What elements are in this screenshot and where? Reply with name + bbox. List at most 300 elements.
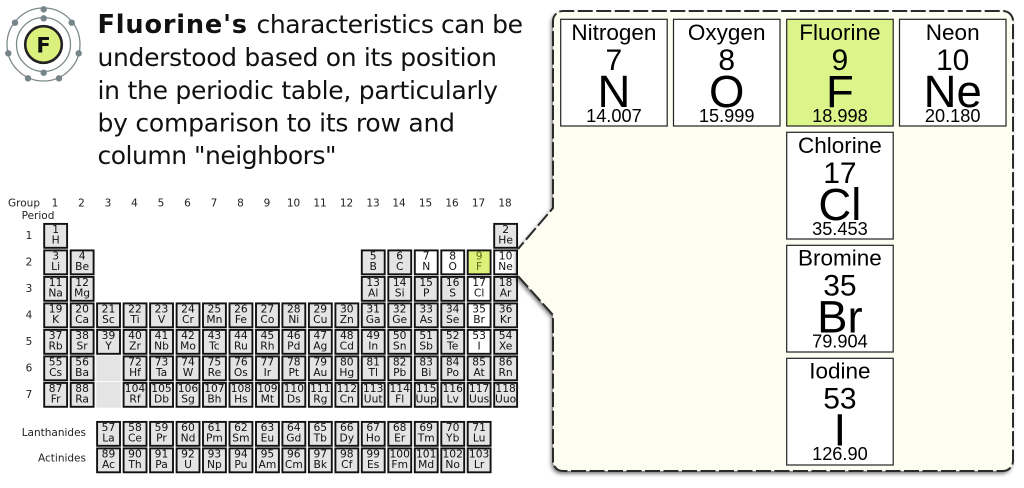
period 5: Rb: [48, 340, 63, 353]
card: iodine: Iodine: [809, 358, 871, 383]
period 4: V: [158, 313, 166, 326]
title text block: in the periodic table, particularly: [98, 76, 498, 105]
period 5: 53: [472, 329, 486, 342]
period 3: Cl: [474, 287, 484, 300]
lanthanides row: Pm: [206, 432, 223, 445]
title text block: understood based on its position: [98, 43, 497, 72]
period 5: 40: [128, 329, 142, 342]
period 3: Al: [368, 287, 378, 300]
period 1: 1: [52, 223, 59, 236]
period 2: Be: [75, 260, 89, 273]
period 5: [44, 329, 517, 354]
period 4: Mn: [206, 313, 222, 326]
card: neon: Neon: [926, 20, 980, 45]
lanthanides row: Tb: [313, 432, 327, 445]
period 7: 107: [204, 382, 225, 395]
period 6: Pt: [288, 366, 299, 379]
period 6: [44, 356, 517, 381]
icon: fluorine atom electron shells: F: [36, 34, 51, 58]
period 7: 109: [257, 382, 278, 395]
period 4: 27: [261, 302, 274, 316]
card: fluorine: 18.998: [812, 106, 868, 126]
period 7: 112: [337, 382, 357, 395]
actinides row: 100: [389, 448, 410, 460]
lanthanides row: 62: [234, 421, 248, 434]
period 4: 32: [393, 302, 407, 316]
period 6: 55: [49, 356, 62, 368]
lanthanides row: Sm: [232, 432, 250, 445]
period 3: 15: [419, 276, 433, 289]
lanthanides row: Lu: [473, 432, 485, 445]
period 6: Tl: [367, 366, 378, 379]
period 7: 115: [416, 382, 436, 395]
card: fluorine: Fluorine: [799, 20, 881, 45]
period 2: Ne: [498, 260, 513, 273]
period 6: 79: [313, 356, 327, 368]
period 6: 85: [472, 356, 486, 368]
period 4: Fe: [235, 313, 247, 326]
group and period axis labels: 7: [211, 198, 217, 210]
group and period axis labels: 16: [445, 198, 459, 210]
period 3: 13: [366, 276, 380, 289]
actinides row: 92: [181, 448, 195, 460]
period 3: Mg: [74, 287, 90, 300]
period 5: 38: [75, 329, 89, 342]
group and period axis labels: 2: [78, 198, 85, 210]
lanthanides row: 71: [472, 421, 486, 434]
period 4: [44, 302, 517, 327]
period 1: He: [498, 234, 513, 247]
card: fluorine: 9: [832, 44, 848, 77]
period 4: Cu: [313, 313, 327, 326]
card: nitrogen: 7: [606, 44, 622, 77]
period 5: In: [368, 340, 378, 353]
period 5: 48: [340, 329, 354, 342]
period 3: P: [423, 287, 430, 300]
group and period axis labels: 1: [52, 198, 58, 210]
period 4: Ga: [366, 313, 381, 326]
period 2: O: [448, 260, 457, 273]
title text block: characteristics can be: [256, 10, 523, 39]
period 1: H: [52, 234, 60, 247]
lanthanides row: 58: [128, 421, 142, 434]
actinides row: Es: [367, 458, 380, 471]
lanthanides row: La: [102, 432, 115, 445]
period 4: As: [420, 313, 433, 326]
period 6: 56: [75, 356, 89, 368]
group and period axis labels: 3: [26, 283, 32, 295]
group and period axis labels: Group: [8, 198, 40, 210]
period 4: 24: [181, 302, 195, 316]
period 7: Uup: [416, 393, 437, 406]
callout panel with pointer to fluorine neighbors: [518, 11, 1013, 471]
period 6: 76: [234, 356, 248, 368]
period 4: 34: [446, 302, 460, 316]
period 7: Rf: [129, 393, 141, 406]
group and period axis labels: Actinides: [38, 452, 86, 464]
lanthanides row: 60: [181, 421, 195, 434]
period 6: 72: [128, 356, 142, 368]
actinides row: 102: [442, 448, 463, 460]
lanthanides row: Ce: [128, 432, 142, 445]
actinides row: [97, 448, 491, 472]
actinides row: 93: [208, 448, 221, 460]
card: nitrogen: Nitrogen: [571, 20, 656, 45]
card: oxygen: [674, 19, 780, 126]
period 6: 86: [499, 356, 513, 368]
period 7: Fl: [395, 393, 404, 406]
card: fluorine: F: [826, 66, 854, 117]
period 7: Bh: [207, 393, 221, 406]
period 7: Lv: [447, 393, 459, 406]
lanthanides row: Er: [394, 432, 406, 445]
period 7: 104: [125, 382, 145, 395]
lanthanides row: Ho: [366, 432, 380, 445]
period 5: Nb: [154, 340, 169, 353]
actinides row: U: [184, 458, 192, 471]
period 5: 49: [366, 329, 380, 342]
period 4: Kr: [500, 313, 512, 326]
period 5: Rh: [260, 340, 275, 353]
period 7: 114: [389, 382, 410, 395]
lanthanides row: Dy: [340, 432, 354, 445]
actinides row: Md: [418, 458, 434, 471]
actinides row: No: [445, 458, 460, 471]
period 7: Uus: [469, 393, 490, 406]
period 4: 36: [499, 302, 513, 316]
period 6: 84: [446, 356, 460, 368]
card: bromine: Br: [817, 292, 863, 342]
group and period axis labels: 2: [26, 256, 32, 268]
period 7: Rg: [313, 393, 327, 406]
period 5: 37: [49, 329, 62, 342]
lanthanides row: Tm: [417, 432, 435, 445]
period 4: Br: [473, 313, 486, 326]
actinides row: 94: [234, 448, 248, 460]
period 5: 50: [393, 329, 407, 342]
period 4: 25: [208, 302, 221, 316]
period 5: Ru: [234, 340, 248, 353]
actinides row: 96: [287, 448, 301, 460]
card: bromine: Bromine: [798, 246, 882, 271]
lanthanides row: 57: [102, 421, 115, 434]
lanthanides row: 70: [446, 421, 460, 434]
periodic table: [44, 223, 517, 472]
card: neon: Ne: [924, 66, 982, 117]
period 5: Y: [104, 340, 112, 353]
period 6: Cs: [49, 366, 63, 379]
period 7: Db: [154, 393, 169, 406]
lanthanides row: 67: [366, 421, 380, 434]
title text block: column "neighbors": [98, 141, 336, 170]
period 7: 88: [75, 382, 89, 395]
actinides row: Bk: [314, 458, 328, 471]
period 2: Li: [51, 260, 60, 273]
period 2: 7: [423, 250, 430, 262]
period 3: [44, 276, 517, 301]
period 4: Zn: [340, 313, 354, 326]
card: bromine: 35: [823, 270, 857, 303]
actinides row: 91: [155, 448, 168, 460]
card: nitrogen: N: [597, 66, 630, 117]
card: chlorine: Chlorine: [798, 133, 882, 158]
period 6: Os: [234, 366, 248, 379]
group and period axis labels: 1: [26, 230, 32, 242]
period 5: 44: [234, 329, 248, 342]
period 4: Sc: [102, 313, 115, 326]
period 7: 118: [495, 382, 516, 395]
lanthanides row: 65: [313, 421, 327, 434]
period 4: 22: [128, 302, 142, 316]
period 4: 35: [472, 302, 486, 316]
period 7: Fr: [51, 393, 61, 406]
period 5: 42: [181, 329, 195, 342]
period 6: Au: [313, 366, 327, 379]
card: fluorine: [787, 19, 893, 126]
period 3: Ar: [500, 287, 512, 300]
period 5: 45: [261, 329, 274, 342]
period 2: 6: [396, 250, 403, 262]
period 6: 81: [366, 356, 380, 368]
period 5: Sb: [419, 340, 433, 353]
period 5: 46: [287, 329, 301, 342]
period 7: Cn: [340, 393, 354, 406]
period 4: K: [52, 313, 60, 326]
period 5: Ag: [313, 340, 327, 353]
period 5: Sr: [77, 340, 88, 353]
card: oxygen: 8: [718, 44, 735, 77]
period 3: 14: [393, 276, 407, 289]
period 4: Ca: [75, 313, 89, 326]
lanthanides row: 61: [208, 421, 221, 434]
element detail cards: [561, 19, 1006, 465]
period 5: Zr: [129, 340, 141, 353]
actinides row: Lr: [474, 458, 485, 471]
period 4: Ge: [392, 313, 407, 326]
lanthanides row: Nd: [181, 432, 195, 445]
lanthanides row: Pr: [156, 432, 167, 445]
group and period axis labels: 7: [26, 389, 32, 401]
period 3: 16: [446, 276, 460, 289]
card: neon: 10: [936, 44, 969, 77]
title text block: Fluorine's: [98, 10, 247, 40]
period 6: Ba: [75, 366, 89, 379]
group and period axis labels: Lanthanides: [22, 427, 86, 439]
period 6: 77: [261, 356, 274, 368]
period 7: 117: [469, 382, 489, 395]
actinides row: Fm: [391, 458, 408, 471]
period 7: Mt: [261, 393, 274, 406]
card: bromine: [787, 245, 893, 352]
period 5: Pd: [287, 340, 300, 353]
period 1: 2: [502, 223, 509, 236]
group and period axis labels: 11: [313, 198, 327, 210]
actinides row: Cf: [341, 458, 353, 471]
period 7: 116: [442, 382, 463, 395]
card: chlorine: [787, 132, 893, 239]
period 5: Sn: [393, 340, 406, 353]
period 4: 19: [49, 302, 63, 316]
group and period axis labels: 5: [158, 198, 164, 210]
period 7: 106: [178, 382, 198, 395]
card: iodine: 53: [823, 382, 857, 415]
group and period axis labels: 18: [498, 198, 512, 210]
card: oxygen: 15.999: [699, 106, 755, 126]
actinides row: Np: [207, 458, 222, 471]
period 3: 18: [499, 276, 513, 289]
actinides row: Pu: [234, 458, 247, 471]
lanthanides row: [97, 421, 491, 446]
period 6: Ir: [264, 366, 272, 379]
period 7: Ds: [287, 393, 301, 406]
period 2: 4: [79, 250, 86, 262]
actinides row: Ac: [102, 458, 115, 471]
group and period axis labels: 13: [366, 198, 380, 210]
group and period axis labels: 15: [419, 198, 432, 210]
period 4: 33: [419, 302, 433, 316]
actinides row: 89: [102, 448, 115, 460]
period 5: 39: [102, 329, 115, 342]
period 2: 9: [476, 250, 483, 262]
period 2: F: [476, 260, 482, 273]
lanthanides row: Gd: [286, 432, 301, 445]
period 3: Si: [395, 287, 405, 300]
actinides row: 98: [340, 448, 354, 460]
period 4: Co: [260, 313, 274, 326]
period 7: [44, 382, 517, 408]
period 2: N: [422, 260, 430, 273]
period 7: Uut: [364, 393, 383, 406]
period 2: C: [396, 260, 403, 273]
lanthanides row: 68: [393, 421, 407, 434]
actinides row: 101: [416, 448, 436, 460]
period 6: At: [473, 366, 485, 379]
card: oxygen: O: [709, 66, 744, 117]
period 4: 30: [340, 302, 354, 316]
period 4: 26: [234, 302, 248, 316]
period 6: 75: [208, 356, 221, 368]
period 4: 28: [287, 302, 301, 316]
group and period axis labels: 4: [131, 198, 138, 210]
actinides row: Cm: [285, 458, 303, 471]
period 5: 51: [419, 329, 433, 342]
period 5: Xe: [499, 340, 512, 353]
period 3: 17: [472, 276, 486, 289]
period 5: 43: [208, 329, 221, 342]
card: nitrogen: [561, 19, 667, 126]
period 4: Ti: [129, 313, 140, 326]
period 6: Hf: [129, 366, 141, 379]
period 3: 11: [49, 276, 62, 289]
period 5: 52: [446, 329, 460, 342]
period 7: Hs: [234, 393, 248, 406]
card: chlorine: 17: [823, 157, 857, 190]
actinides row: Pa: [155, 458, 168, 471]
period 2: [44, 250, 517, 274]
period 6: 78: [287, 356, 301, 368]
period 5: Te: [446, 340, 458, 353]
period 7: 87: [49, 382, 62, 395]
period 7: Sg: [181, 393, 195, 406]
card: nitrogen: 14.007: [586, 106, 642, 126]
card: iodine: 126.90: [812, 444, 868, 464]
period 5: 47: [313, 329, 327, 342]
actinides row: 90: [128, 448, 142, 460]
period 2: 8: [449, 250, 456, 262]
period 4: 31: [366, 302, 380, 316]
group and period axis labels: [8, 198, 512, 464]
period 6: Bi: [421, 366, 431, 379]
card: neon: [900, 19, 1006, 126]
period 7: 108: [231, 382, 251, 395]
period 7: Uuo: [495, 393, 516, 406]
title text block: [98, 10, 523, 170]
period 3: 12: [75, 276, 89, 289]
actinides row: 99: [366, 448, 380, 460]
period 6: Pb: [393, 366, 407, 379]
actinides row: 103: [469, 448, 489, 460]
period 4: 23: [155, 302, 168, 316]
lanthanides row: 63: [261, 421, 274, 434]
actinides row: 95: [261, 448, 274, 460]
period 6: 82: [393, 356, 407, 368]
period 5: 41: [155, 329, 168, 342]
period 7: 111: [310, 382, 331, 395]
period 2: B: [370, 260, 377, 273]
period 4: Se: [446, 313, 459, 326]
period 6: W: [183, 366, 194, 379]
period 5: 54: [499, 329, 513, 342]
group and period axis labels: Period: [22, 210, 54, 222]
period 2: 10: [499, 250, 513, 262]
period 5: Tc: [208, 340, 220, 353]
lanthanides row: Yb: [445, 432, 460, 445]
period 6: Re: [208, 366, 221, 379]
period 4: 29: [313, 302, 327, 316]
actinides row: 97: [313, 448, 327, 460]
actinides row: Am: [259, 458, 276, 471]
card: oxygen: Oxygen: [688, 20, 765, 45]
period 1: [44, 223, 517, 248]
period 6: 73: [155, 356, 168, 368]
lanthanides row: 66: [340, 421, 354, 434]
card: iodine: [787, 358, 893, 465]
period 7: 113: [363, 382, 383, 395]
period 4: 20: [75, 302, 89, 316]
group and period axis labels: 5: [26, 336, 32, 348]
period 7: Ra: [75, 393, 89, 406]
period 3: Na: [48, 287, 63, 300]
period 2: 5: [370, 250, 377, 262]
title text block: by comparison to its row and: [98, 108, 455, 138]
group and period axis labels: 14: [392, 198, 406, 210]
group and period axis labels: 8: [237, 198, 244, 210]
period 3: S: [449, 287, 456, 300]
group and period axis labels: 12: [340, 198, 353, 210]
group and period axis labels: 9: [264, 198, 270, 210]
group and period axis labels: 4: [26, 310, 33, 322]
period 6: Ta: [155, 366, 167, 379]
period 4: Ni: [288, 313, 299, 326]
card: iodine: I: [834, 404, 846, 455]
period 5: Mo: [180, 340, 196, 353]
actinides row: Th: [127, 458, 142, 471]
period 2: 3: [52, 250, 59, 262]
period 6: 74: [181, 356, 195, 368]
period 5: I: [478, 340, 481, 353]
card: neon: 20.180: [925, 106, 981, 126]
lanthanides row: 64: [287, 421, 301, 434]
